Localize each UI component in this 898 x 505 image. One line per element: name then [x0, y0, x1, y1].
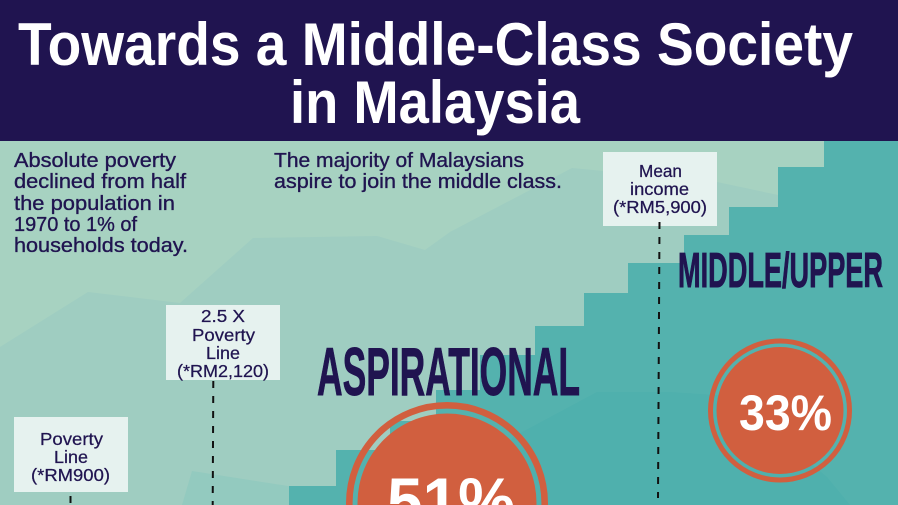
stat: 33 percent: 33%	[739, 385, 832, 441]
callout: 2.5 x poverty line	[166, 305, 280, 381]
header band	[0, 0, 898, 141]
staircase	[289, 141, 898, 505]
title: in Malaysia	[290, 69, 581, 136]
text block: majority aspire: aspire to join the middle class.	[274, 170, 562, 193]
text block: absolute poverty: Absolute poverty	[14, 149, 177, 172]
heading: aspirational: ASPIRATIONAL	[317, 334, 580, 410]
callout: 2.5 x poverty line: 2.5 X	[201, 306, 245, 326]
dashed line: poverty line	[70, 496, 72, 505]
stat: 33 percent	[710, 341, 850, 480]
dashed line: 2.5x poverty line	[212, 381, 214, 505]
callout: 2.5 x poverty line: Poverty	[192, 325, 255, 345]
stat: 51 percent	[349, 405, 545, 505]
text block: absolute poverty: the population in	[14, 192, 175, 215]
callout: poverty line: Line	[54, 447, 88, 467]
callout: mean income	[603, 152, 717, 226]
text block: absolute poverty: households today.	[14, 234, 188, 257]
text block: majority aspire	[274, 149, 562, 193]
callout: poverty line: Poverty	[40, 429, 103, 449]
callout: 2.5 x poverty line: Line	[206, 343, 240, 363]
dashed line: mean income	[658, 222, 660, 498]
background: layered hills	[0, 141, 898, 505]
title	[18, 11, 854, 136]
callout: poverty line	[14, 417, 128, 492]
text block: absolute poverty: 1970 to 1% of	[14, 213, 137, 236]
text block: majority aspire: The majority of Malaysians	[274, 149, 524, 172]
callout: mean income: income	[630, 179, 689, 199]
callout: mean income: (*RM5,900)	[613, 197, 707, 217]
callout: 2.5 x poverty line: (*RM2,120)	[177, 361, 269, 381]
text block: absolute poverty	[14, 149, 188, 257]
text block: absolute poverty: declined from half	[14, 170, 186, 193]
callout: poverty line: (*RM900)	[31, 465, 110, 485]
callout: mean income: Mean	[639, 161, 682, 181]
